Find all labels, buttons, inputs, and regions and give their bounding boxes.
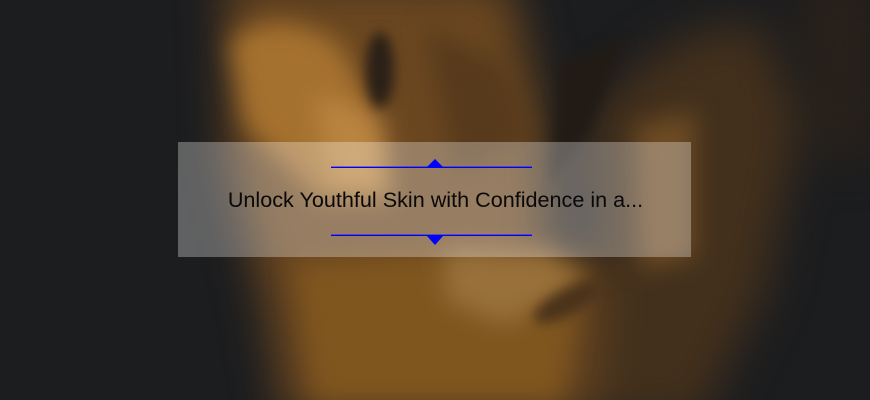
title text: Unlock Youthful Skin with Confidence in a... [228, 187, 643, 212]
title panel [178, 142, 691, 257]
bottom divider with diamond [331, 234, 532, 245]
top divider with diamond [331, 159, 532, 168]
